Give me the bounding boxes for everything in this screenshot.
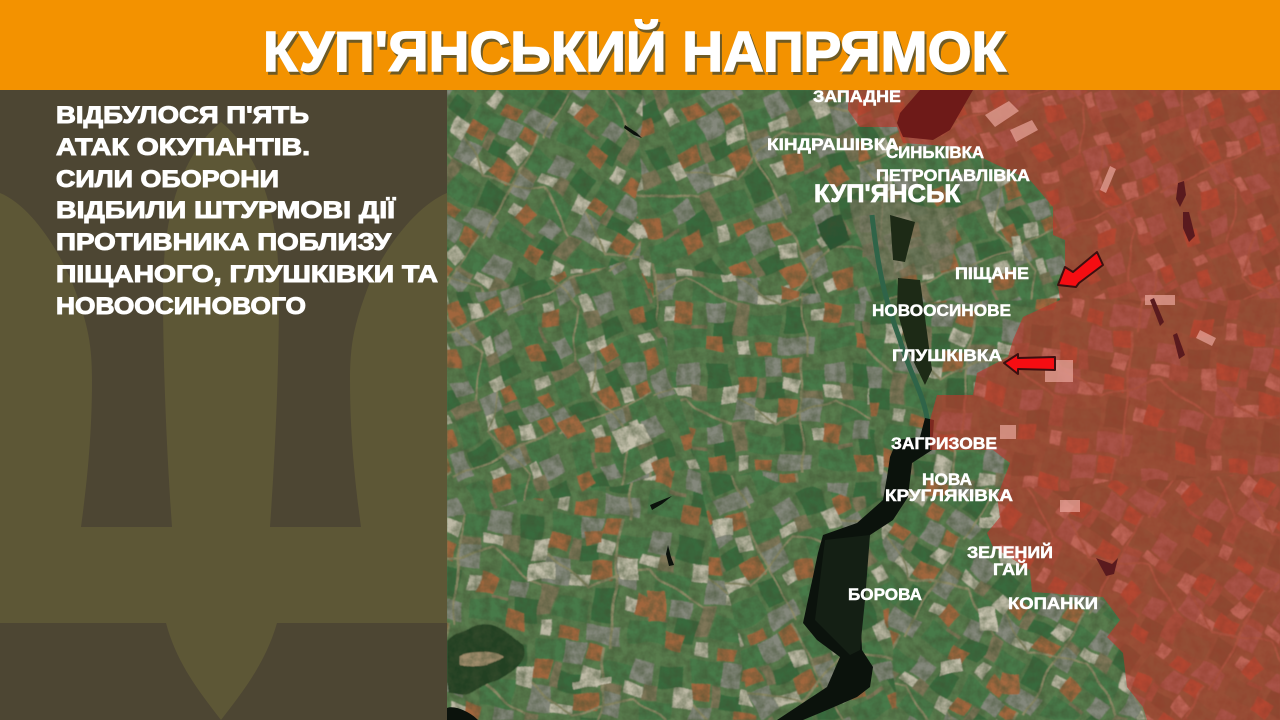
forest: east bank — [890, 215, 932, 385]
text: summary: ПРОТИВНИКА ПОБЛИЗУ — [56, 229, 392, 256]
river upper — [872, 215, 928, 425]
river: reservoir — [777, 418, 934, 720]
text: summary: ВІДБИЛИ ШТУРМОВІ ДІЇ — [56, 197, 397, 224]
noise texture — [447, 90, 1280, 720]
text: summary: ВІДБУЛОСЯ П'ЯТЬ — [56, 102, 309, 129]
labels: settlements: ПІЩАНЕ — [955, 264, 1029, 283]
occupied forest: dark red — [897, 90, 973, 140]
labels: settlements: ПЕТРОПАВЛІВКА — [876, 166, 1030, 185]
text: summary: НОВООСИНОВОГО — [56, 293, 306, 320]
arrow: Pishchane — [1058, 252, 1103, 287]
title: КУП'ЯНСЬКИЙ НАПРЯМОК — [263, 19, 1006, 84]
text: summary: ПІЩАНОГО, ГЛУШКІВКИ ТА — [56, 261, 438, 288]
labels: settlements: КРУГЛЯКІВКА — [885, 486, 1013, 505]
text: summary: АТАК ОКУПАНТІВ. — [56, 134, 310, 161]
labels: settlements — [767, 87, 1098, 613]
labels: settlements: ГАЙ — [993, 560, 1028, 579]
labels: settlements: БОРОВА — [848, 585, 922, 604]
icon: trident watermark — [0, 122, 447, 720]
forest: west of Kupiansk — [817, 217, 850, 250]
forest: bottom left — [447, 627, 524, 695]
text: summary: СИЛИ ОБОРОНИ — [56, 166, 279, 193]
labels: settlements: НОВА — [922, 470, 972, 489]
field highlights — [530, 235, 1020, 686]
labels: settlements: ЗЕЛЕНИЙ — [967, 543, 1053, 562]
panel: left text panel with trident — [0, 90, 447, 720]
panel: satellite map — [430, 70, 1280, 720]
labels: settlements: КІНДРАШІВКА — [767, 135, 899, 154]
forest: Borova bank — [815, 535, 870, 655]
forest clearing — [462, 650, 505, 666]
header bar — [0, 0, 1280, 90]
text: summary — [56, 102, 438, 320]
urban area: Kupiansk — [850, 200, 960, 280]
labels: settlements: СИНЬКІВКА — [886, 143, 984, 162]
labels: settlements: НОВООСИНОВЕ — [872, 301, 1011, 320]
occupied fields highlights — [985, 101, 1216, 512]
occupied territory — [848, 90, 1280, 720]
dark lakes — [1096, 181, 1195, 576]
arrow: Hlushkivka — [1004, 354, 1055, 374]
map fields — [430, 70, 1280, 720]
small lakes — [447, 125, 674, 720]
labels: settlements: ЗАПАДНЕ — [813, 87, 901, 106]
map base — [447, 90, 1280, 720]
labels: settlements: ГЛУШКІВКА — [892, 346, 1002, 365]
labels: settlements: ЗАГРИЗОВЕ — [891, 434, 997, 453]
labels: settlements: КОПАНКИ — [1008, 594, 1098, 613]
labels: settlements: КУП'ЯНСЬК — [814, 180, 961, 208]
